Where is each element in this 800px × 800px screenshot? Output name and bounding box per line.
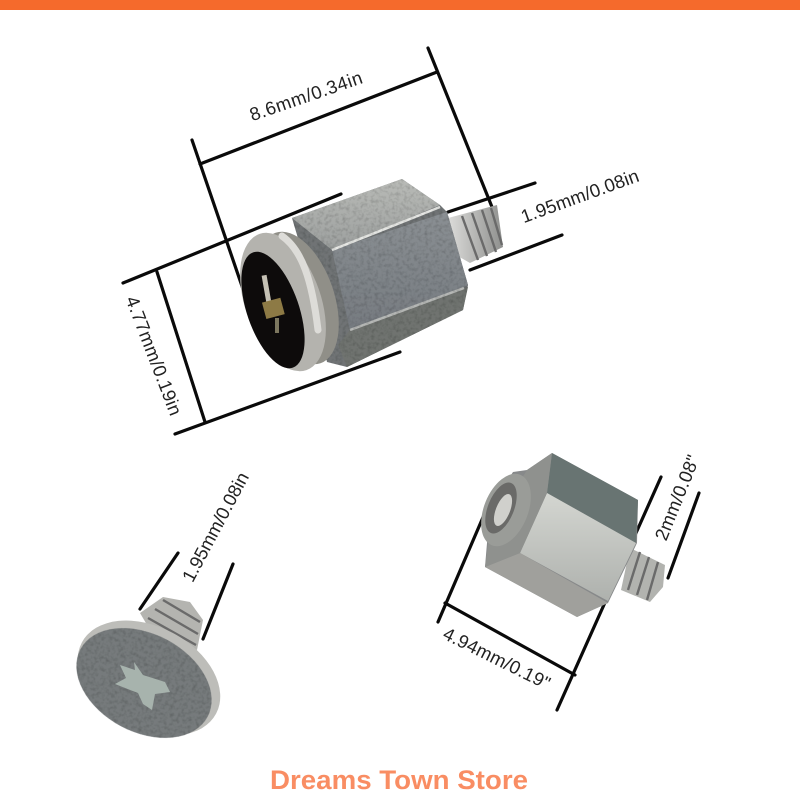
screw slot — [262, 275, 285, 333]
screw head rim — [58, 597, 240, 759]
top orange bar — [0, 0, 800, 10]
dimension lines: main standoff — [123, 48, 562, 434]
washer flange — [241, 221, 355, 375]
main standoff screw photo — [224, 179, 503, 382]
store name footer: Dreams Town Store — [270, 765, 528, 795]
label: 4.94mm/0.19": 4.94mm/0.19" — [440, 623, 554, 694]
label: 1.95mm/0.08in right: 1.95mm/0.08in — [518, 165, 642, 227]
hex body — [485, 453, 638, 617]
small standoff photo — [471, 453, 665, 617]
label: 2mm/0.08": 2mm/0.08" — [650, 452, 704, 543]
thread — [621, 548, 665, 602]
hex body — [292, 179, 468, 367]
dimension lines: flat screw — [140, 553, 233, 639]
thread — [448, 205, 503, 263]
dark screw face — [229, 244, 317, 376]
screw head face — [57, 606, 231, 760]
label: 4.77mm/0.19in: 4.77mm/0.19in — [122, 293, 186, 418]
dimension lines: small standoff — [438, 477, 699, 710]
washer ring and hole — [471, 467, 541, 553]
label: 1.95mm/0.08in lower: 1.95mm/0.08in — [178, 469, 253, 585]
flat head screw photo — [57, 597, 240, 760]
washer highlight — [282, 236, 318, 330]
thread — [140, 597, 203, 650]
star recess — [115, 662, 170, 710]
label: 8.6mm/0.34in: 8.6mm/0.34in — [247, 67, 365, 125]
